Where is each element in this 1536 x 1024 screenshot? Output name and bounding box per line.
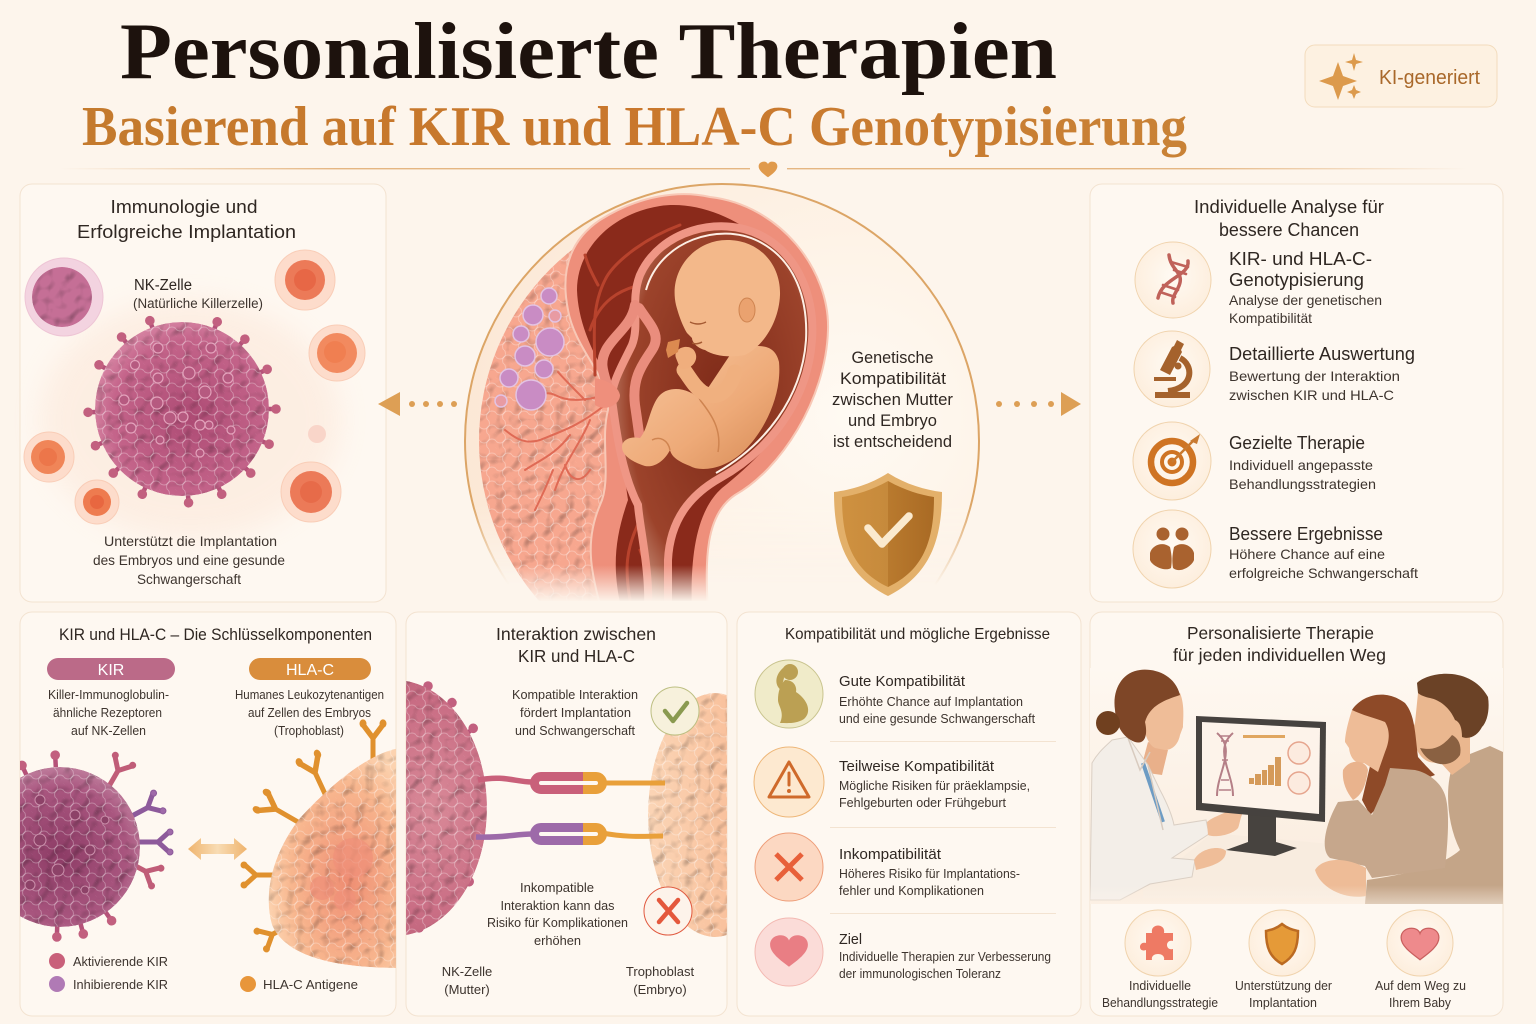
panel heading: bessere Chancen (1219, 220, 1359, 240)
panel heading: KIR und HLA-C (518, 646, 635, 666)
item: Gezielte Therapie: Individuell angepasste (1229, 457, 1373, 473)
title: Personalisierte Therapien (120, 6, 1057, 96)
panel heading: Personalisierte Therapie (1187, 623, 1374, 643)
result: good (839, 673, 1035, 726)
result: incompatible: Inkompatibilität (839, 846, 942, 863)
HLA-C description: (Trophoblast) (274, 723, 344, 738)
compatible text: Kompatible Interaktion (512, 687, 638, 702)
HLA-C description (235, 687, 384, 738)
result: incompatible: Höheres Risiko für Implantations- (839, 866, 1020, 881)
NK cell label: NK-Zelle (134, 277, 192, 294)
item: Gezielte Therapie: Gezielte Therapie (1229, 433, 1365, 453)
panel heading: Individuelle Analyse für (1194, 197, 1384, 217)
result: goal (839, 931, 1051, 981)
panel heading: Interaktion zwischen (496, 624, 656, 644)
panel heading: Immunologie und (110, 197, 258, 217)
caption: baby: Auf dem Weg zu (1375, 978, 1466, 993)
connector: activating pair (478, 776, 665, 790)
arrow: left dotted (378, 392, 457, 416)
legend: Aktivierende KIR (73, 954, 168, 969)
legend: HLA-C Antigene (263, 977, 358, 992)
icon: microscope (1134, 331, 1210, 407)
cells (303, 680, 782, 937)
baby (622, 240, 780, 469)
HLA-C description: Humanes Leukozytenantigen (235, 687, 384, 702)
callout: genetic compatibility (832, 348, 953, 451)
caption: support: Unterstützung der (1235, 978, 1333, 993)
panel heading (77, 197, 296, 242)
small cells: orange (24, 250, 365, 524)
icon: small shield (1249, 910, 1315, 976)
panel: Interaktion (406, 612, 728, 1016)
NK cell label: (Natürliche Killerzelle) (133, 296, 263, 311)
baby thigh shading (652, 400, 719, 452)
umbilical cord (602, 305, 656, 458)
cell labels (442, 964, 694, 997)
result: good: und eine gesunde Schwangerschaft (839, 711, 1035, 726)
icon: target (1133, 422, 1211, 500)
compatible text (512, 687, 638, 738)
panel heading (1173, 623, 1386, 665)
badge: KI-generiert (1305, 45, 1497, 107)
item: Genotypisierung: Kompatibilität (1229, 310, 1312, 326)
icon: DNA (1135, 242, 1211, 318)
panel: Personalisierte Therapie (1090, 612, 1503, 1016)
caption: baby: Ihrem Baby (1389, 995, 1451, 1010)
compatible text: fördert Implantation (520, 705, 631, 720)
incompatible text: erhöhen (534, 933, 581, 948)
panel heading: Kompatibilität und mögliche Ergebnisse (785, 626, 1050, 643)
NK cell main illustration (83, 315, 281, 508)
callout: genetic compatibility: zwischen Mutter (832, 390, 953, 409)
NK cell with receptors (20, 750, 174, 942)
result: partial (839, 758, 1030, 810)
panel heading: KIR und HLA-C – Die Schlüsselkomponenten (59, 626, 372, 644)
caption: strategy (1102, 978, 1218, 1010)
woman (1315, 695, 1448, 897)
KIR description (48, 687, 169, 738)
panel: central uterus illustration (464, 183, 980, 600)
subtitle: Basierend auf KIR und HLA-C Genotypisierung (82, 96, 1187, 158)
baby head (675, 240, 780, 356)
table (1143, 833, 1368, 898)
caption: strategy: Individuelle (1129, 978, 1191, 993)
callout: genetic compatibility: Genetische (852, 348, 934, 367)
item: Gezielte Therapie: Behandlungsstrategien (1229, 476, 1376, 492)
item: Genotypisierung: Genotypisierung (1229, 270, 1364, 290)
monitor (1196, 716, 1326, 856)
panel heading (1194, 197, 1384, 240)
pill: KIR (47, 658, 175, 680)
arrow: interaction (188, 838, 247, 860)
result: good: Erhöhte Chance auf Implantation (839, 694, 1023, 709)
scene: consultation (1090, 668, 1503, 904)
panel description: des Embryos und eine gesunde (93, 552, 285, 568)
NK cell label (133, 277, 263, 311)
item: Genotypisierung (1229, 249, 1382, 326)
immune cells in tissue (495, 288, 564, 410)
result: goal: der immunologischen Toleranz (839, 966, 1001, 981)
caption: support (1235, 978, 1333, 1010)
result: goal: Ziel (839, 931, 862, 948)
item: Ergebnisse: Bessere Ergebnisse (1229, 524, 1383, 544)
panel: Immunologie (20, 184, 386, 602)
callout: genetic compatibility: und Embryo (848, 411, 937, 430)
item: Auswertung: Detaillierte Auswertung (1229, 344, 1415, 364)
item: Auswertung: Bewertung der Interaktion (1229, 368, 1400, 384)
panel description (93, 533, 285, 587)
pill: HLA-C: HLA-C (286, 662, 334, 679)
cell labels: Trophoblast (626, 964, 694, 979)
item: Ergebnisse: Höhere Chance auf eine (1229, 546, 1385, 562)
incompatible text (487, 880, 628, 948)
panel: Individuelle Analyse (1090, 184, 1503, 602)
KIR description: ähnliche Rezeptoren (53, 705, 162, 720)
pill: HLA-C (249, 658, 371, 680)
monitor DNA (1217, 733, 1233, 796)
amniotic sac (612, 226, 812, 612)
item: Ergebnisse (1229, 524, 1418, 581)
compatible text: und Schwangerschaft (515, 723, 635, 738)
icon: warning (754, 747, 824, 817)
title divider with heart (60, 162, 1467, 177)
baby body and leg (622, 346, 779, 469)
HLA-C description: auf Zellen des Embryos (248, 705, 371, 720)
panel: Kompatibilität (737, 612, 1081, 1016)
item: Gezielte Therapie (1229, 433, 1376, 492)
icon: shield with check (834, 473, 942, 596)
connector: inhibiting pair (476, 828, 663, 840)
incompatible text: Interaktion kann das (500, 898, 615, 913)
trophoblast with antigens (241, 720, 400, 968)
bottom fade (516, 566, 708, 601)
doctor (1090, 670, 1249, 900)
man (1365, 674, 1503, 904)
caption: baby (1375, 978, 1466, 1010)
caption: strategy: Behandlungsstrategie (1102, 995, 1218, 1010)
cell labels: (Embryo) (633, 982, 687, 997)
icon: pregnant silhouette (755, 660, 823, 728)
icon: puzzle (1125, 910, 1191, 976)
result: partial: Fehlgeburten oder Frühgeburt (839, 795, 1006, 810)
uterine outer wall (565, 194, 828, 612)
item: Ergebnisse: erfolgreiche Schwangerschaft (1229, 565, 1418, 581)
maternal tissue (479, 250, 608, 600)
badge: KI-generiert: KI-generiert (1379, 67, 1480, 89)
panel description: Schwangerschaft (137, 571, 241, 587)
icon: cross (644, 887, 692, 935)
tissue-cord junction (595, 378, 620, 408)
legend: Inhibierende KIR (73, 977, 168, 992)
uterine cavity (577, 205, 760, 599)
cell labels: NK-Zelle (442, 964, 492, 979)
KIR description: auf NK-Zellen (71, 723, 146, 738)
icon: couple (1133, 510, 1211, 588)
icon: incompatibility (755, 833, 823, 901)
panel heading: für jeden individuellen Weg (1173, 645, 1386, 665)
pill: KIR: KIR (98, 662, 124, 679)
incompatible text: Inkompatible (520, 880, 594, 895)
panel heading: Erfolgreiche Implantation (77, 222, 296, 242)
incompatible text: Risiko für Komplikationen (487, 915, 628, 930)
result: partial: Teilweise Kompatibilität (839, 758, 995, 775)
cell labels: (Mutter) (444, 982, 490, 997)
result: incompatible: fehler und Komplikationen (839, 883, 984, 898)
caption: support: Implantation (1249, 995, 1317, 1010)
panel description: Unterstützt die Implantation (104, 533, 277, 549)
monitor chart (1249, 757, 1281, 786)
icon: goal heart (755, 918, 823, 986)
arrow: right dotted (996, 392, 1081, 416)
vessels in cavity (585, 225, 680, 600)
item: Auswertung (1229, 344, 1415, 403)
callout: genetic compatibility: Kompatibilität (840, 369, 946, 388)
panel heading (496, 624, 656, 666)
item: Genotypisierung: Analyse der genetischen (1229, 292, 1382, 308)
result: goal: Individuelle Therapien zur Verbesserung (839, 949, 1051, 964)
small cell: pink (25, 258, 103, 336)
icon: check (651, 687, 699, 735)
KIR description: Killer-Immunoglobulin- (48, 687, 169, 702)
background glow (40, 300, 340, 540)
result: incompatible (839, 846, 1020, 898)
panel: KIR und HLA-C (0, 612, 400, 1016)
callout: genetic compatibility: ist entscheidend (833, 432, 952, 451)
icon: large heart (1387, 910, 1453, 976)
legend (49, 953, 358, 992)
item: Auswertung: zwischen KIR und HLA-C (1229, 387, 1394, 403)
baby arm and hands (676, 364, 708, 400)
result: partial: Mögliche Risiken für präeklampsie, (839, 778, 1030, 793)
result: good: Gute Kompatibilität (839, 673, 966, 690)
item: Genotypisierung: KIR- und HLA-C- (1229, 249, 1372, 269)
